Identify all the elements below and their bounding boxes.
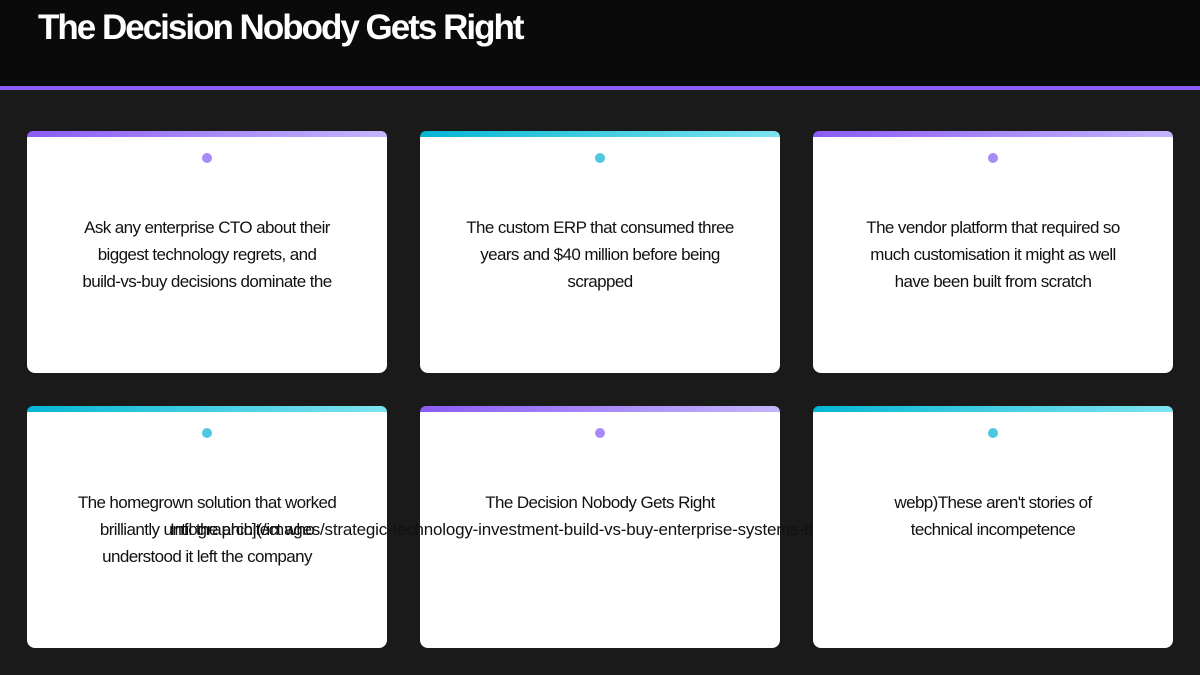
card 6 text: technical incompetence xyxy=(911,520,1075,539)
card 3 xyxy=(813,131,1173,373)
card 1 text: Ask any enterprise CTO about their xyxy=(84,218,330,237)
card 2 text xyxy=(466,218,734,291)
card 3 text: have been built from scratch xyxy=(895,272,1091,291)
card 1 xyxy=(27,131,387,373)
card 6 xyxy=(813,406,1173,648)
card 4 xyxy=(27,406,387,648)
card 2 xyxy=(420,131,780,373)
card 3 text: The vendor platform that required so xyxy=(866,218,1120,237)
card 5 xyxy=(420,406,780,648)
card 3 text: much customisation it might as well xyxy=(870,245,1116,264)
card 4 text xyxy=(78,493,336,566)
card 2 text: scrapped xyxy=(567,272,633,291)
title: The Decision Nobody Gets Right xyxy=(38,8,522,47)
card 1 text: build-vs-buy decisions dominate the xyxy=(82,272,332,291)
card 2 text: years and $40 million before being xyxy=(480,245,720,264)
card 5 text: The Decision Nobody Gets Right xyxy=(485,493,715,512)
card 4 text: brilliantly until the architect who xyxy=(100,520,314,539)
card 1 text: biggest technology regrets, and xyxy=(98,245,316,264)
card 4 text: understood it left the company xyxy=(102,547,312,566)
card 2 text: The custom ERP that consumed three xyxy=(466,218,734,237)
card 3 text xyxy=(866,218,1120,291)
card 6 text xyxy=(894,493,1092,539)
card 4 text: The homegrown solution that worked xyxy=(78,493,336,512)
header xyxy=(0,0,1200,86)
card 6 text: webp)These aren't stories of xyxy=(894,493,1092,512)
card 1 text xyxy=(82,218,332,291)
card 5 overflow text: Infographic](/images/strategic-technology-investment-build-vs-buy-enterprise-systems-the-decision-nobody-gets-right.webp) xyxy=(170,520,1077,539)
